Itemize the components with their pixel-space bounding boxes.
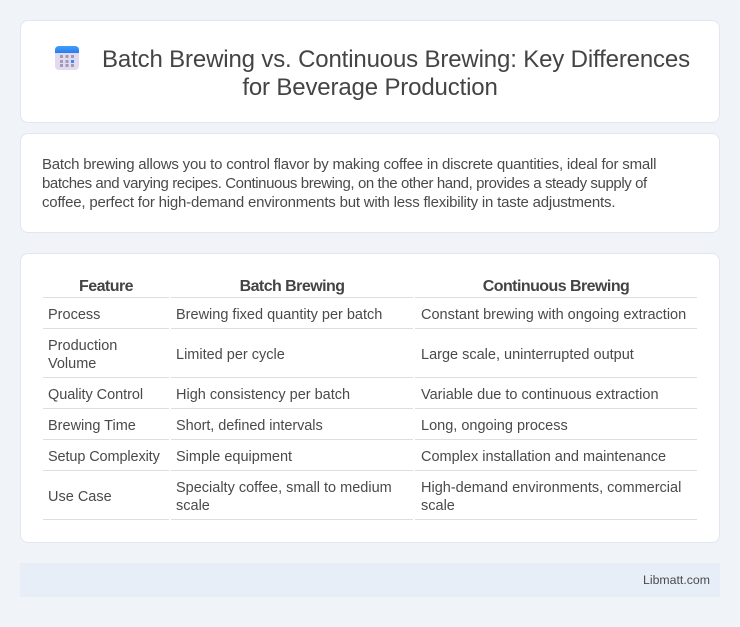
row: quality control: [48, 387, 659, 403]
row: process: Brewing fixed quantity per batch: [176, 307, 382, 323]
table header row: [79, 278, 629, 295]
row: production volume: Production: [48, 338, 117, 354]
row: production volume: Volume: [48, 356, 96, 372]
row: use case: scale: [176, 498, 210, 514]
title: [102, 46, 690, 101]
row: production volume: [48, 338, 634, 372]
row: brewing time: [48, 418, 568, 434]
row: use case: Use Case: [48, 489, 112, 505]
intro paragraph: Batch brewing allows you to control flavor by making coffee in discrete quantities, ideal for small: [42, 156, 656, 173]
row: setup complexity: Simple equipment: [176, 449, 292, 465]
table header row: Feature: [79, 278, 133, 295]
panel: title card: [20, 20, 720, 123]
row: production volume: Large scale, uninterrupted output: [421, 347, 634, 363]
row: quality control: Quality Control: [48, 387, 143, 403]
table header row: Batch Brewing: [240, 278, 344, 295]
row: use case: Specialty coffee, small to medium: [176, 480, 392, 496]
intro paragraph: [42, 156, 656, 211]
footer credit: Libmatt.com: [643, 573, 710, 587]
comparison table: [43, 278, 697, 520]
panel: intro text card: [20, 133, 720, 233]
title: Batch Brewing vs. Continuous Brewing: Key Differences: [102, 46, 690, 73]
row: quality control: High consistency per batch: [176, 387, 350, 403]
row: brewing time: Brewing Time: [48, 418, 136, 434]
intro paragraph: coffee, perfect for high-demand environments but with less flexibility in taste adjustments.: [42, 194, 615, 211]
table header row: Continuous Brewing: [483, 278, 629, 295]
row: production volume: Limited per cycle: [176, 347, 285, 363]
row: process: [48, 307, 686, 323]
row: use case: High-demand environments, commercial: [421, 480, 681, 496]
row: quality control: Variable due to continuous extraction: [421, 387, 659, 403]
row: process: Constant brewing with ongoing extraction: [421, 307, 686, 323]
row: brewing time: Short, defined intervals: [176, 418, 323, 434]
panel: comparison table card: [20, 253, 720, 543]
icon: calendar: [55, 46, 79, 70]
row: process: Process: [48, 307, 100, 323]
title: for Beverage Production: [242, 74, 498, 101]
row: setup complexity: [48, 449, 666, 465]
footer bar: [20, 563, 720, 597]
row: setup complexity: Setup Complexity: [48, 449, 160, 465]
row: use case: scale: [421, 498, 455, 514]
row: brewing time: Long, ongoing process: [421, 418, 568, 434]
intro paragraph: batches and varying recipes. Continuous brewing, on the other hand, provides a steady supply of: [42, 175, 647, 192]
row: use case: [48, 480, 681, 514]
row: setup complexity: Complex installation and maintenance: [421, 449, 666, 465]
